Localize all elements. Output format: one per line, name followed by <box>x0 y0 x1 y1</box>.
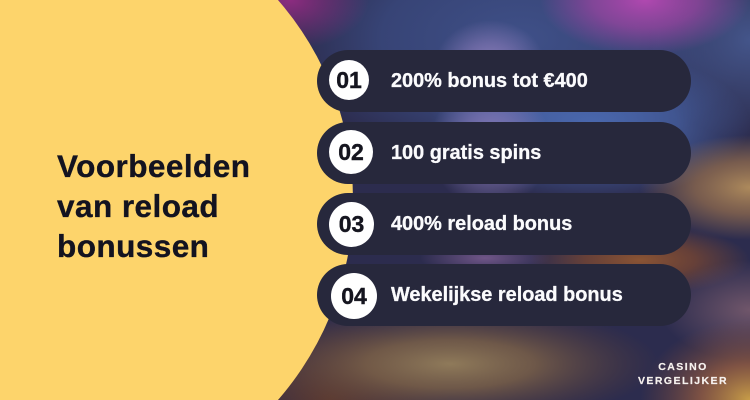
logo: Casino Vergelijker <box>638 361 728 387</box>
number badge 02: 02 <box>338 139 364 165</box>
title: Voorbeelden <box>57 148 250 184</box>
list item 4 <box>317 264 691 326</box>
logo: Casino Vergelijker: CASINO <box>658 361 708 373</box>
number badge 01 <box>329 60 369 100</box>
list item 1 <box>317 50 691 112</box>
label 4: Wekelijkse reload bonus <box>391 284 623 306</box>
number badge 04: 04 <box>341 283 367 309</box>
label 3: 400% reload bonus <box>391 213 572 235</box>
number badge 03: 03 <box>339 211 364 237</box>
label 1: 200% bonus tot €400 <box>391 70 588 92</box>
label 2: 100 gratis spins <box>391 142 541 164</box>
list item 3 <box>317 193 691 255</box>
number badge 04 <box>331 273 377 319</box>
logo: Casino Vergelijker: VERGELIJKER <box>638 375 728 387</box>
title <box>56 148 250 264</box>
title: van reload <box>57 188 219 224</box>
number badge 01: 01 <box>336 66 362 92</box>
number badge 03 <box>329 202 374 247</box>
title: bonussen <box>57 228 209 264</box>
list item 2 <box>317 122 691 184</box>
number badge 02 <box>329 130 373 174</box>
